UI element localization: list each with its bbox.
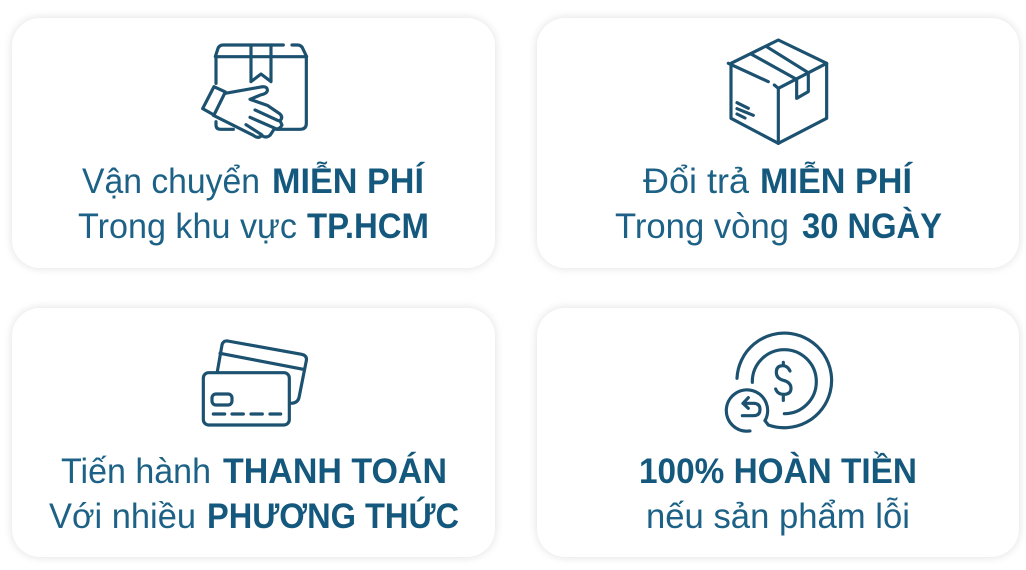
heading: payment methods: Với nhiều (49, 497, 196, 536)
heading: payment methods (49, 451, 459, 536)
heading: free shipping: Vận chuyển (82, 162, 260, 201)
panel: free shipping (12, 18, 495, 268)
heading: free returns: Đổi trả (643, 162, 750, 201)
heading: free returns: MIỄN PHÍ (760, 161, 913, 201)
heading: free shipping: MIỄN PHÍ (272, 161, 425, 201)
heading: free shipping (78, 161, 429, 246)
heading: free returns (615, 161, 942, 246)
panel: free returns (537, 18, 1019, 268)
heading: payment methods: PHƯƠNG THỨC (207, 496, 459, 536)
heading: money back: nếu sản phẩm lỗi (646, 497, 910, 536)
heading: money back (639, 451, 917, 536)
icon: coin refund (726, 333, 832, 431)
heading: payment methods: THANH TOÁN (223, 451, 447, 491)
heading: payment methods: Tiến hành (61, 452, 211, 491)
heading: free shipping: Trong khu vực (78, 207, 297, 246)
heading: free returns: 30 NGÀY (802, 206, 942, 246)
heading: money back: 100% HOÀN TIỀN (639, 451, 917, 491)
heading: free returns: Trong vòng (615, 207, 789, 246)
icon: parcel box (728, 40, 827, 143)
panel: payment methods (12, 308, 495, 557)
icon: hand holding box (203, 45, 307, 137)
icon: credit cards (203, 341, 306, 425)
heading: free shipping: TP.HCM (307, 207, 429, 246)
panel: money back (537, 308, 1019, 557)
